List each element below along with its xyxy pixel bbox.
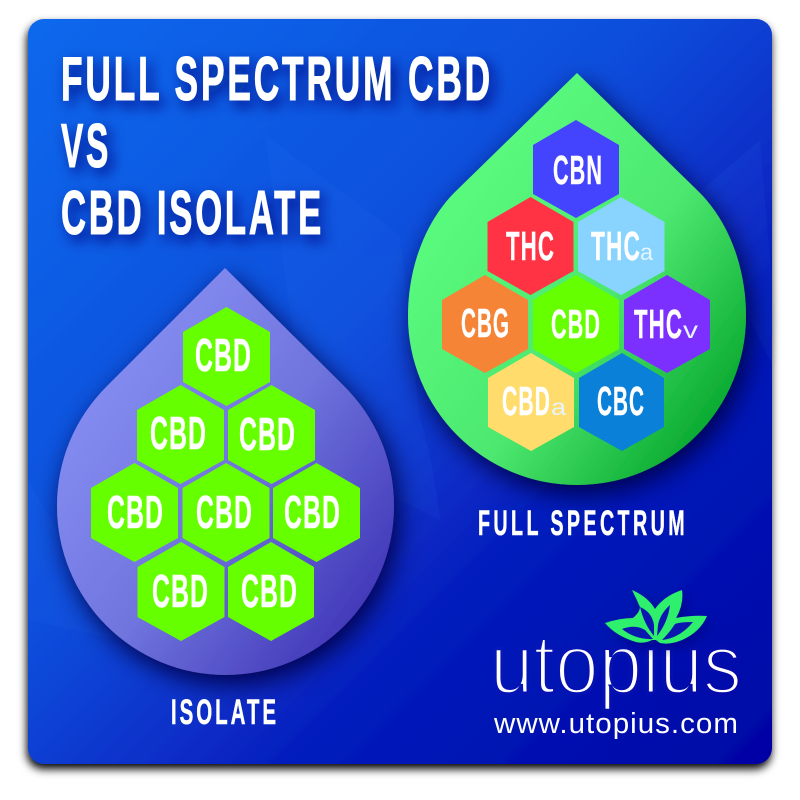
drop shape: isolate [57, 268, 394, 675]
hexagon: CBC [579, 353, 664, 451]
hexagon: CBN [533, 120, 619, 218]
drop shape: full spectrum [408, 73, 746, 485]
hexagon labels: CBD [107, 329, 341, 617]
logo: utopius [490, 590, 742, 740]
title: VS [61, 112, 111, 181]
title: CBD ISOLATE [61, 179, 324, 248]
wordmark: utopius: utopius [490, 617, 742, 711]
hexagon: CBN: CBN [553, 147, 603, 193]
hexagon: CBD [533, 275, 619, 373]
hexagon: THCv: v [683, 317, 699, 343]
website url: www.utopius.com [493, 708, 739, 740]
faint background leaf shapes [28, 135, 780, 640]
hexagon: CBD: CBD [551, 301, 601, 347]
hexagon labels: CBD: CBD [239, 408, 296, 460]
hexagon labels: CBD: CBD [196, 486, 253, 538]
title: FULL SPECTRUM CBD [61, 45, 493, 114]
hexagon labels: CBD: CBD [152, 565, 209, 617]
hexagon: THCa: THC [591, 223, 641, 269]
hexagon: CBDa [488, 353, 574, 451]
hexagon labels: CBD: CBD [241, 565, 298, 617]
panel: isolate drop [57, 268, 394, 675]
panel: full spectrum drop [408, 73, 746, 485]
title [61, 45, 493, 248]
hexagon labels: CBD: CBD [195, 329, 252, 381]
hexagon labels: CBD: CBD [284, 486, 341, 538]
hexagon: THCa: a [640, 239, 653, 265]
hexagon: THC: THC [506, 223, 555, 269]
icon: lotus leaves [605, 590, 707, 644]
hexagon: CBC: CBC [597, 378, 645, 424]
heading: isolate: ISOLATE [171, 693, 279, 732]
hexagon cluster: CBD isolate [91, 307, 360, 641]
hexagon: THC [488, 197, 574, 295]
hexagon: CBG [442, 275, 528, 373]
hexagon labels: CBD: CBD [150, 407, 207, 459]
hexagon labels: CBD: CBD [107, 486, 164, 538]
hexagon: CBDa: a [551, 394, 566, 420]
hexagon: THCv [624, 275, 710, 373]
hexagon: THCv: THC [634, 301, 683, 347]
hexagon: CBDa: CBD [502, 378, 551, 424]
hexagon: THCa [578, 197, 664, 295]
hexagon: CBG: CBG [461, 300, 510, 346]
